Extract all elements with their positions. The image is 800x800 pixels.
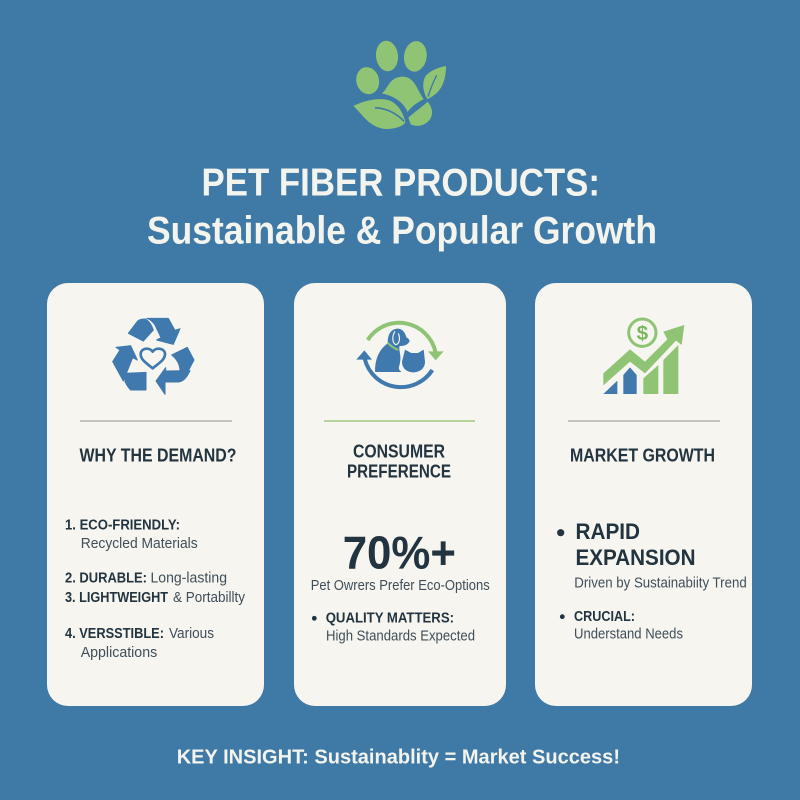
- list item 4: 4. VERSSTIBLE:: [65, 626, 164, 642]
- title: Sustainable & Popular Growth: [147, 210, 657, 252]
- list item 4: [65, 626, 214, 661]
- title: PET FIBER PRODUCTS:: [202, 162, 600, 204]
- bullet: crucial: [560, 609, 683, 643]
- bullet: quality matters: High Standards Expected: [326, 629, 475, 645]
- footer: key insight: KEY INSIGHT: Sustainablity = Market Success!: [177, 745, 620, 768]
- stat: 70%+: 70%+: [343, 526, 456, 578]
- bullet: quality matters: QUALITY MATTERS:: [326, 610, 454, 626]
- list item 1: [65, 518, 198, 552]
- list item 2: [65, 571, 227, 587]
- list item 3: [65, 590, 246, 606]
- list item 1: 1. ECO-FRIENDLY:: [65, 518, 180, 534]
- list item 3: & Portabillty: [173, 590, 246, 606]
- list item 2: Long-lasting: [150, 571, 227, 587]
- heading: consumer preference: [347, 442, 451, 482]
- heading: market growth: MARKET GROWTH: [570, 446, 715, 466]
- list item 4: Various: [169, 626, 214, 642]
- heading: why the demand: WHY THE DEMAND?: [80, 446, 236, 466]
- bullet: rapid expansion: EXPANSION: [576, 545, 696, 570]
- icon: recycling arrows with heart: [113, 318, 194, 394]
- heading: consumer preference: CONSUMER: [353, 442, 445, 462]
- bullet: crucial: CRUCIAL:: [574, 609, 635, 625]
- panel: why the demand: [47, 283, 264, 706]
- icon: growth chart with dollar coin: [603, 319, 684, 394]
- stat caption: Pet Owrers Prefer Eco-Options: [311, 578, 490, 594]
- title: [147, 162, 657, 252]
- bullet: rapid expansion: [557, 519, 747, 591]
- list item 2: 2. DURABLE:: [65, 571, 147, 587]
- panel: market growth: [535, 283, 752, 706]
- icon: growth chart with dollar coin: $: [637, 322, 649, 345]
- icon: paw with leaves: [353, 40, 446, 129]
- list item 3: 3. LIGHTWEIGHT: [65, 590, 168, 606]
- list item 4: Applications: [81, 645, 157, 661]
- panel: consumer preference: [294, 283, 506, 706]
- heading: consumer preference: PREFERENCE: [347, 462, 451, 482]
- bullet: quality matters: [312, 610, 475, 645]
- bullet: rapid expansion: RAPID: [576, 519, 640, 544]
- bullet: crucial: Understand Needs: [574, 627, 683, 643]
- bullet: rapid expansion: Driven by Sustainabiity Trend: [574, 575, 747, 591]
- icon: dog and cat in cycle: [356, 323, 444, 387]
- list item 1: Recycled Materials: [81, 536, 198, 552]
